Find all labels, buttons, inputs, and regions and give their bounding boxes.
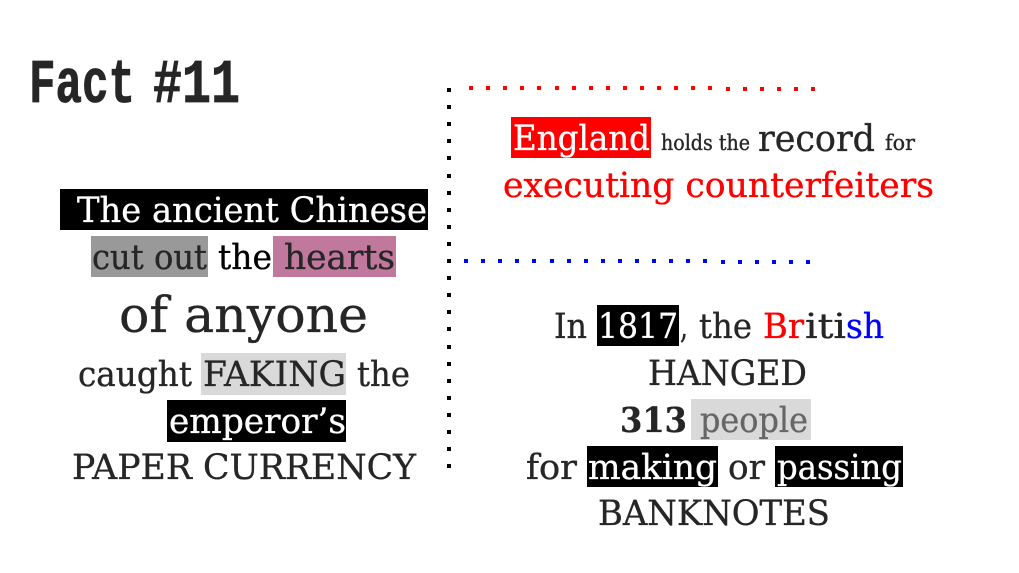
line: executing counterfeiters: executing counterfeiters bbox=[503, 166, 934, 206]
line: emperor's: emperor’s bbox=[169, 402, 346, 442]
line: 313 people: 313 bbox=[620, 400, 687, 441]
line: England holds the record for: for bbox=[885, 131, 916, 155]
line: cut out the hearts: the bbox=[218, 238, 272, 278]
vertical dotted divider bbox=[447, 88, 451, 468]
panel: 1817 hangings bbox=[526, 305, 903, 534]
blue dotted divider bbox=[464, 259, 810, 264]
line: England holds the record for: England bbox=[513, 119, 650, 159]
line: In 1817, the British: the bbox=[699, 307, 752, 347]
line: In 1817, the British bbox=[554, 305, 884, 347]
line: England holds the record for bbox=[511, 117, 916, 160]
line: 313 people: people bbox=[700, 401, 808, 441]
line: for making or passing: or bbox=[728, 448, 765, 488]
line: cut out the hearts bbox=[91, 236, 396, 278]
title bbox=[29, 52, 240, 121]
line: caught FAKING the bbox=[78, 353, 410, 395]
line: England holds the record for: holds the bbox=[661, 131, 750, 155]
line: In 1817, the British: 1817 bbox=[598, 307, 678, 347]
line: cut out the hearts: cut out bbox=[92, 238, 207, 278]
line: In 1817, the British: , bbox=[680, 307, 688, 347]
line: for making or passing: for bbox=[526, 448, 577, 488]
line: for making or passing: making bbox=[588, 448, 717, 488]
line: cut out the hearts: hearts bbox=[284, 238, 395, 278]
line: PAPER CURRENCY: PAPER CURRENCY bbox=[72, 448, 417, 488]
line: In 1817, the British: Br bbox=[763, 307, 804, 347]
title: #11 bbox=[153, 52, 240, 121]
panel: England record bbox=[503, 117, 934, 206]
line: In 1817, the British: In bbox=[554, 307, 587, 347]
line: HANGED: HANGED bbox=[648, 354, 807, 394]
title: Fact bbox=[29, 52, 135, 121]
line: England holds the record for: record bbox=[758, 119, 875, 160]
line: for making or passing bbox=[526, 446, 903, 488]
line: The ancient Chinese: The ancient Chinese bbox=[77, 191, 427, 231]
line: 313 people bbox=[620, 399, 811, 441]
line: caught FAKING the: the bbox=[357, 355, 410, 395]
line: In 1817, the British: sh bbox=[846, 307, 884, 347]
line: BANKNOTES: BANKNOTES bbox=[598, 494, 830, 534]
line: In 1817, the British: iti bbox=[805, 307, 846, 347]
line: of anyone: of anyone bbox=[119, 286, 368, 344]
panel: ancient Chinese fact bbox=[60, 189, 428, 488]
line: caught FAKING the: caught bbox=[78, 355, 192, 395]
line: caught FAKING the: FAKING bbox=[203, 355, 346, 395]
red dotted divider bbox=[469, 86, 815, 91]
line: for making or passing: passing bbox=[777, 448, 902, 488]
